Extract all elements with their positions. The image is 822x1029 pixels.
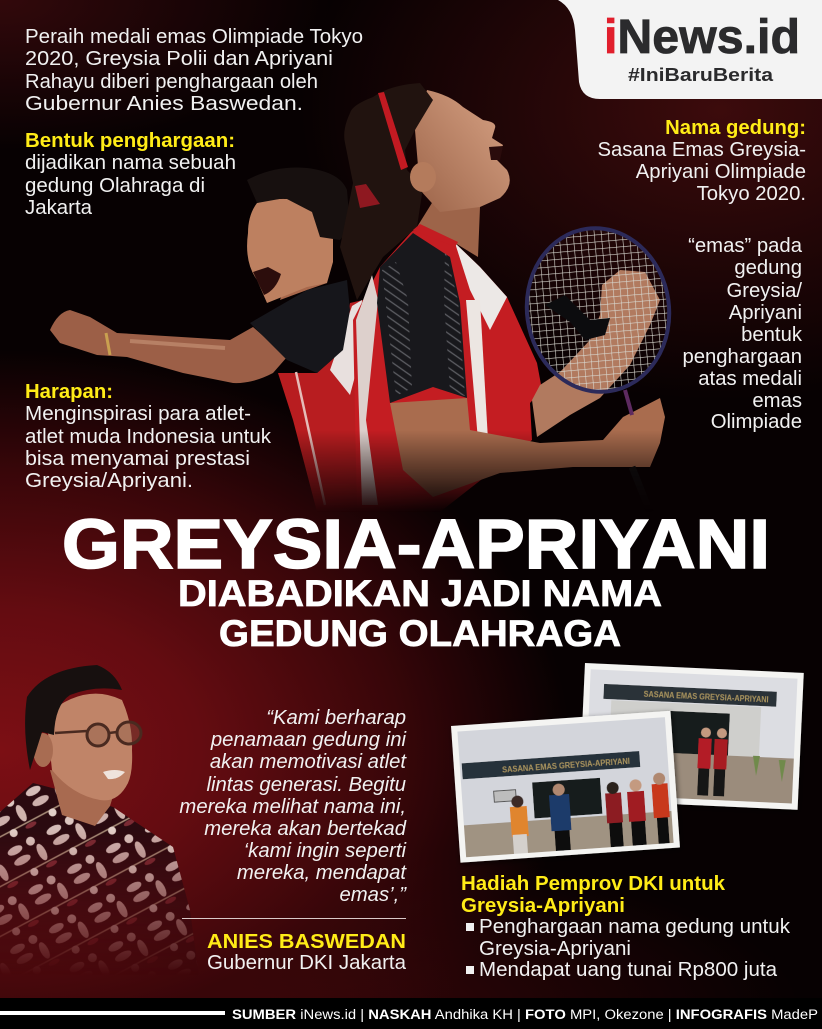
- text block: makna emas: Apriyani: [729, 302, 802, 324]
- text block: hadiah: Greysia-Apriyani: [461, 895, 625, 917]
- text block: makna emas: penghargaan: [682, 346, 802, 368]
- quote: lintas generasi. Begitu: [206, 774, 406, 796]
- title: [62, 505, 770, 654]
- text block: intro: Peraih medali emas Olimpiade Tokyo: [25, 26, 363, 48]
- quote: akan memotivasi atlet: [210, 751, 407, 773]
- footer credits: [0, 998, 822, 1029]
- text block: nama gedung: Apriyani Olimpiade: [636, 161, 806, 183]
- text block: makna emas: [682, 235, 803, 433]
- photo: ceremony at building: [451, 711, 680, 863]
- text block: intro: 2020, Greysia Polii dan Apriyani: [25, 48, 333, 70]
- title: GREYSIA-APRIYANI: [62, 505, 770, 583]
- quote attribution: Gubernur DKI Jakarta: [207, 952, 407, 974]
- text block: makna emas: Olimpiade: [711, 411, 802, 433]
- text block: bentuk penghargaan: Jakarta: [25, 197, 93, 219]
- text block: harapan: bisa menyamai prestasi: [25, 448, 250, 470]
- quote attribution: [207, 931, 407, 974]
- quote: mereka akan bertekad: [204, 818, 407, 840]
- text block: hadiah: [461, 873, 791, 981]
- photo: building with two athletes: SASANA EMAS GREYSIA-APRIYANI: [643, 690, 769, 704]
- text block: harapan: Menginspirasi para atlet-: [25, 403, 251, 425]
- icon: badminton racket: [524, 226, 672, 394]
- text block: harapan: atlet muda Indonesia untuk: [25, 426, 272, 448]
- text block: bentuk penghargaan: [25, 130, 236, 219]
- text block: intro: Gubernur Anies Baswedan.: [25, 93, 303, 115]
- quote: mereka melihat nama ini,: [179, 796, 406, 818]
- figure: Apriyani: [50, 168, 372, 512]
- logo: iNews.id: [558, 0, 822, 99]
- text block: nama gedung: Sasana Emas Greysia-: [597, 139, 806, 161]
- text block: nama gedung: Tokyo 2020.: [697, 183, 806, 205]
- photo: athletes Greysia and Apriyani: [50, 83, 680, 512]
- text block: intro: [25, 26, 363, 115]
- text block: makna emas: Greysia/: [726, 280, 802, 302]
- text block: hadiah: Penghargaan nama gedung untuk: [479, 916, 791, 938]
- text block: makna emas: atas medali: [698, 368, 802, 390]
- quote: penamaan gedung ini: [210, 729, 406, 751]
- title: DIABADIKAN JADI NAMA: [178, 573, 662, 614]
- photo: Anies Baswedan: [0, 665, 200, 985]
- photo: building with two athletes: [579, 663, 804, 810]
- logo: iNews.id: iNews.id: [604, 11, 800, 64]
- text block: bentuk penghargaan: gedung Olahraga di: [25, 175, 205, 197]
- text block: hadiah: Hadiah Pemprov DKI untuk: [461, 873, 726, 895]
- quote: “Kami berharap: [266, 707, 406, 729]
- logo: iNews.id: #IniBaruBerita: [628, 65, 774, 85]
- text block: makna emas: bentuk: [741, 324, 803, 346]
- text block: harapan: Harapan:: [25, 381, 113, 403]
- quote attribution: ANIES BASWEDAN: [207, 931, 406, 953]
- text block: makna emas: emas: [752, 390, 802, 412]
- text block: hadiah: Greysia-Apriyani: [479, 938, 631, 960]
- quote: emas’,”: [340, 884, 407, 906]
- text block: makna emas: gedung: [734, 257, 802, 279]
- title: GEDUNG OLAHRAGA: [219, 613, 621, 654]
- text block: harapan: [25, 381, 272, 492]
- text block: hadiah: Mendapat uang tunai Rp800 juta: [479, 959, 778, 981]
- photo: ceremony at building: SASANA EMAS GREYSIA-APRIYANI: [502, 757, 630, 775]
- figure: Greysia: [340, 83, 665, 512]
- text block: nama gedung: Nama gedung:: [665, 117, 806, 139]
- text block: bentuk penghargaan: dijadikan nama sebuah: [25, 152, 236, 174]
- text block: harapan: Greysia/Apriyani.: [25, 470, 193, 492]
- quote: [179, 707, 407, 906]
- quote: ‘kami ingin seperti: [244, 840, 406, 862]
- text block: bentuk penghargaan: Bentuk penghargaan:: [25, 130, 235, 152]
- quote: mereka, mendapat: [237, 862, 407, 884]
- footer credits: SUMBER iNews.id | NASKAH Andhika KH | FOTO MPI, Okezone | INFOGRAFIS MadeP: [232, 1007, 818, 1022]
- text block: nama gedung: [597, 117, 806, 205]
- text block: intro: Rahayu diberi penghargaan oleh: [25, 71, 318, 93]
- text block: makna emas: “emas” pada: [688, 235, 803, 257]
